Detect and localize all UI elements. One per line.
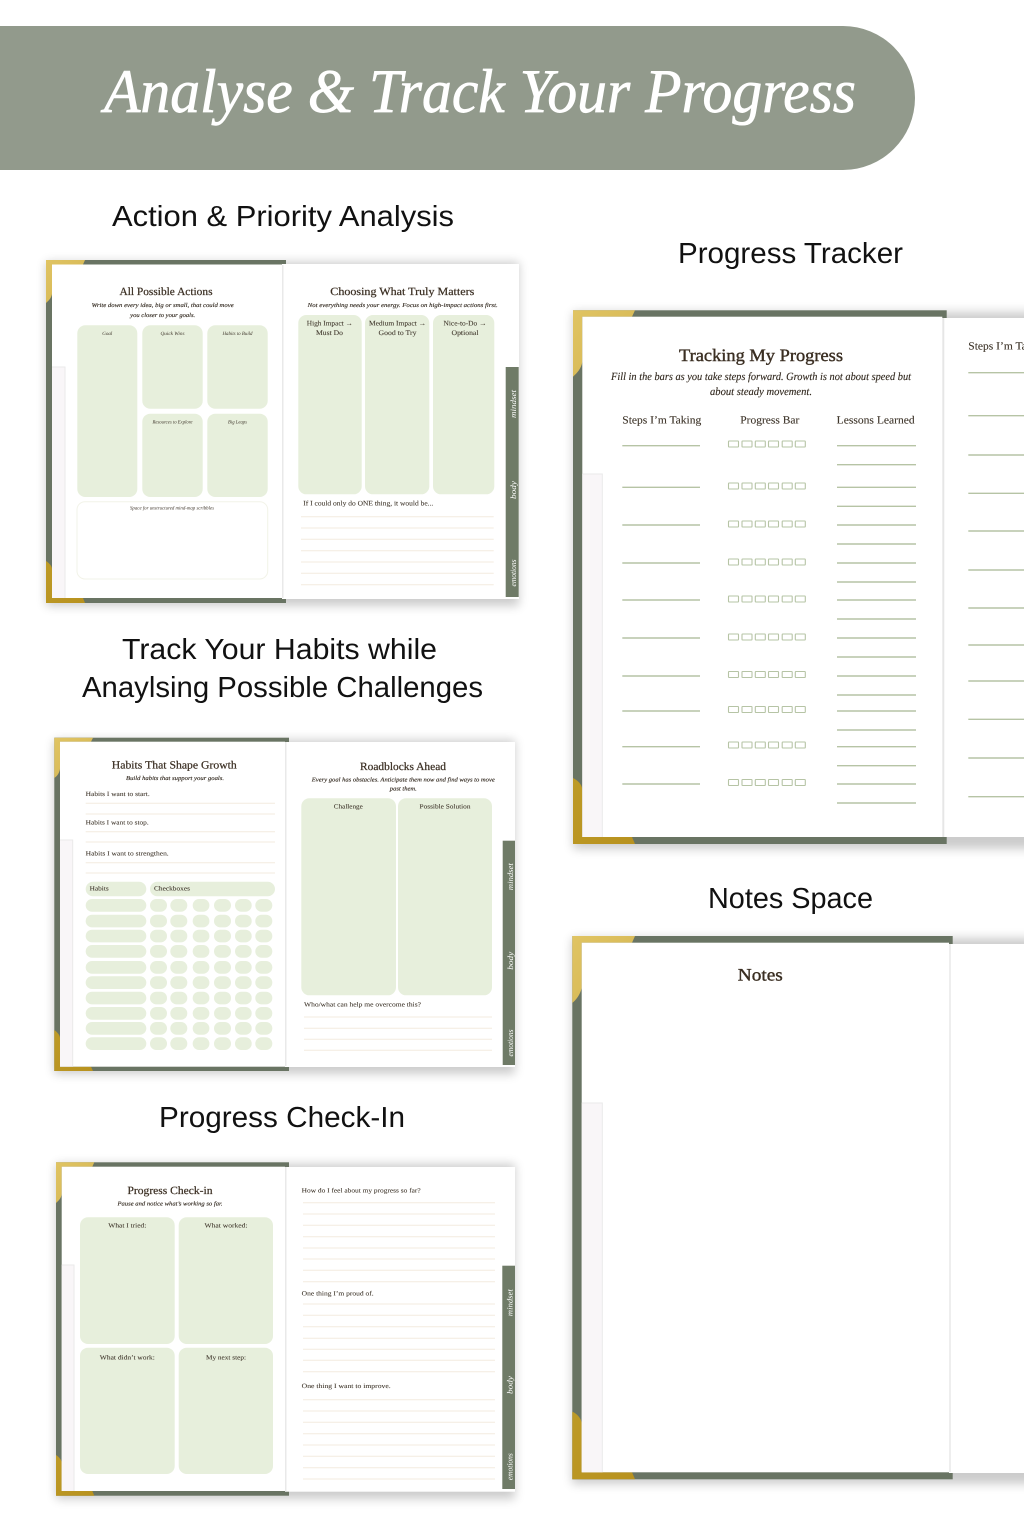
left page: all possible actions (77, 286, 268, 579)
prompt: habits to stop: Habits I want to stop. (86, 820, 149, 827)
page title: Progress Check-in (128, 1185, 213, 1197)
heading: progress tracker: Progress Tracker (678, 238, 903, 270)
card: medium impact: Medium Impact → (369, 320, 426, 328)
card: high impact (298, 315, 362, 494)
card: quick wins: Quick Wins (160, 331, 185, 337)
card: mind map space (77, 502, 268, 579)
card: nice to do: Optional (452, 329, 479, 337)
heading: notes space: Notes Space (708, 883, 873, 915)
card: challenge (301, 798, 396, 995)
side tabs: mindset (506, 862, 515, 890)
card: what I tried (80, 1217, 175, 1344)
prompt: who can help: Who/what can help me overcome this? (304, 1002, 421, 1009)
left page: tracking my progress (610, 345, 916, 803)
page subtitle (311, 777, 495, 793)
side tabs: emotions (509, 560, 518, 586)
writing lines (303, 1203, 495, 1282)
page title: notes: Notes (738, 965, 783, 985)
card: big leaps (207, 414, 268, 497)
card: quick wins (142, 325, 203, 409)
card: possible solution: Possible Solution (420, 804, 471, 811)
page subtitle: about steady movement. (710, 386, 812, 398)
table header: Habits (90, 886, 109, 893)
page subtitle: Every goal has obstacles. Anticipate them now and find ways to move (311, 777, 495, 784)
prompt: habits to strengthen: Habits I want to strengthen. (86, 850, 169, 857)
steps lines (968, 373, 1024, 797)
page subtitle: Pause and notice what’s working so far. (116, 1201, 222, 1208)
card: nice to do (433, 315, 494, 494)
panel: notes spread (572, 936, 1024, 1484)
card: challenge: Challenge (334, 804, 363, 811)
side tabs: emotions (506, 1453, 514, 1480)
page subtitle: past them. (389, 786, 417, 793)
writing lines (86, 803, 275, 873)
card: high impact: Must Do (316, 329, 344, 337)
panel: action and priority planner spread (46, 260, 519, 606)
prompt: one thing: If I could only do ONE thing, it would be... (303, 500, 434, 508)
page title: Choosing What Truly Matters (330, 286, 474, 298)
writing lines (304, 1017, 492, 1050)
card: what I tried: What I tried: (108, 1222, 147, 1229)
title: Analyse & Track Your Progress (100, 58, 856, 126)
writing lines (301, 517, 494, 585)
card: my next step: My next step: (206, 1355, 246, 1362)
table header: Checkboxes (154, 886, 191, 893)
page subtitle: Build habits that support your goals. (126, 775, 224, 782)
card: nice to do: Nice-to-Do → (444, 320, 486, 328)
panel: progress tracker spread (573, 310, 1024, 849)
prompt: want to improve: One thing I want to improve. (302, 1383, 391, 1390)
page subtitle: Not everything needs your energy. Focus on high-impact actions first. (307, 302, 498, 309)
card: goal (77, 325, 137, 497)
column header: lessons: Lessons Learned (837, 414, 915, 426)
right page: reflection prompts (302, 1187, 495, 1479)
heading: track your habits (82, 634, 483, 704)
habit table (86, 882, 275, 1050)
page title: Roadblocks Ahead (360, 761, 447, 773)
page subtitle (92, 302, 234, 319)
progress bar boxes (728, 441, 805, 786)
page title: All Possible Actions (120, 286, 212, 298)
prompt: proud of: One thing I’m proud of. (302, 1290, 374, 1297)
right page: continued steps column (968, 340, 1024, 797)
writing lines (303, 1400, 495, 1479)
side tabs: emotions (506, 1030, 515, 1056)
heading: action and priority analysis: Action & Priority Analysis (112, 201, 454, 233)
card: possible solution (398, 798, 492, 995)
card: resources to explore (142, 414, 203, 497)
card: goal: Goal (102, 331, 113, 337)
lessons lines (837, 446, 916, 803)
side tabs: body (506, 1375, 514, 1394)
left page: progress check-in (80, 1185, 273, 1474)
prompt: how do I feel: How do I feel about my progress so far? (302, 1187, 421, 1194)
card: habits to build (207, 325, 268, 409)
page title: Habits That Shape Growth (112, 759, 237, 771)
card: high impact: High Impact → (307, 320, 353, 328)
card: my next step (179, 1348, 273, 1474)
heading: progress check-in: Progress Check-In (159, 1102, 405, 1134)
side tabs: mindset (506, 1288, 514, 1316)
side tabs: body (509, 480, 518, 499)
card: what worked (179, 1217, 273, 1344)
page subtitle (610, 371, 912, 398)
page subtitle: Fill in the bars as you take steps forward. Growth is not about speed but (610, 371, 912, 383)
card: habits to build: Habits to Build (222, 331, 253, 337)
page subtitle: you closer to your goals. (129, 312, 195, 319)
side tabs (502, 1266, 515, 1489)
table header (86, 882, 275, 896)
card: resources to explore: Resources to Explore (152, 420, 193, 426)
page title: Tracking My Progress (679, 345, 843, 365)
page subtitle: Write down every idea, big or small, that could move (92, 302, 234, 309)
right page: roadblocks ahead (301, 761, 495, 1050)
prompt: habits to start: Habits I want to start. (86, 791, 150, 798)
card: what worked: What worked: (204, 1222, 248, 1229)
heading: track your habits: Track Your Habits while (122, 634, 437, 666)
left page: habits that shape growth (86, 759, 275, 1050)
side tabs: mindset (509, 389, 518, 418)
card: medium impact (365, 315, 429, 494)
card: big leaps: Big Leaps (228, 420, 247, 426)
card: what didn't work: What didn’t work: (100, 1355, 155, 1362)
writing lines (303, 1304, 495, 1372)
card: mind map space: Space for unstructured mind-map scribbles (130, 506, 214, 512)
title banner (0, 26, 915, 170)
heading: track your habits: Anaylsing Possible Challenges (82, 672, 483, 704)
table rows (86, 899, 272, 1050)
card: medium impact: Good to Try (378, 329, 417, 337)
column header: progress bar: Progress Bar (740, 414, 800, 426)
steps lines (622, 446, 700, 784)
side tabs (503, 841, 515, 1065)
right page: choosing what truly matters (298, 286, 498, 585)
panel: habits and roadblocks spread (54, 738, 515, 1074)
side tabs: body (506, 951, 515, 970)
side tabs (506, 367, 519, 597)
panel: progress check-in spread (56, 1162, 515, 1499)
card: what didn't work (80, 1348, 175, 1474)
column header: steps: Steps I’m Taking (622, 414, 702, 426)
